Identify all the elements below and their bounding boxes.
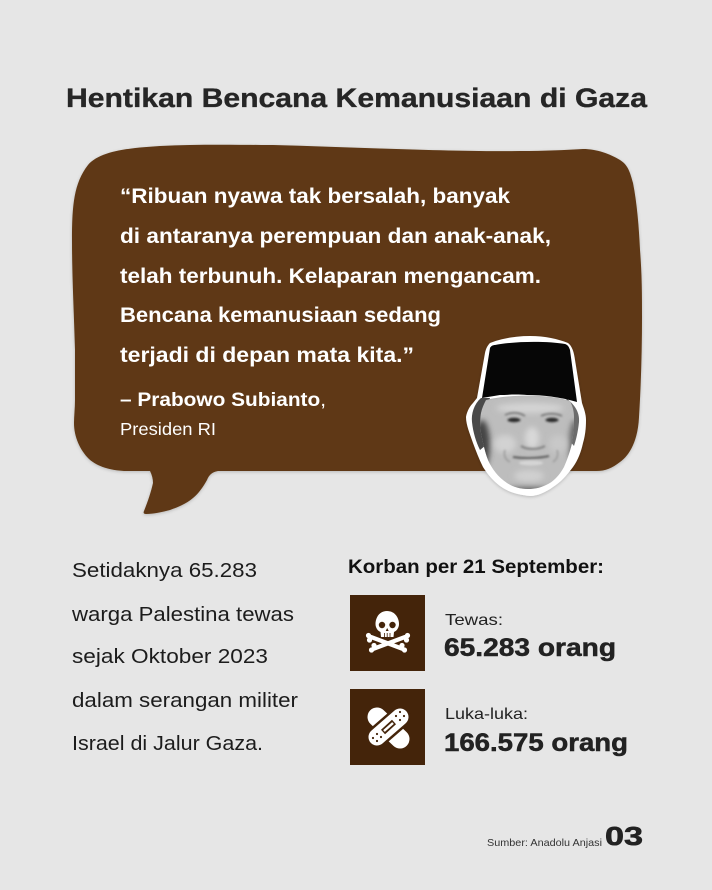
body paragraph xyxy=(71,559,298,755)
nose xyxy=(525,427,539,449)
body paragraph: dalam serangan militer xyxy=(72,689,298,712)
stat: deaths xyxy=(444,612,616,662)
black cap xyxy=(482,342,577,402)
body paragraph: warga Palestina tewas xyxy=(71,603,294,626)
body paragraph: Setidaknya 65.283 xyxy=(72,559,257,582)
quote text: telah terbunuh. Kelaparan mengancam. xyxy=(120,264,541,288)
stat: deaths: 65.283 orang xyxy=(444,634,616,662)
stat: injured: Luka-luka: xyxy=(445,706,528,723)
back bandage xyxy=(377,717,400,739)
mouth xyxy=(513,456,549,466)
sticker outline xyxy=(466,336,586,496)
stat: deaths: Tewas: xyxy=(445,612,503,629)
icon: skull and crossbones xyxy=(350,595,425,671)
attribution: Presiden RI xyxy=(120,419,216,439)
hair and ears xyxy=(472,398,490,450)
cap shadow xyxy=(486,396,566,400)
page number: 03 xyxy=(605,821,643,851)
crossbones xyxy=(371,637,405,649)
quote text xyxy=(120,184,551,367)
quote text: terjadi di depan mata kita.” xyxy=(120,343,414,367)
front bandage xyxy=(377,717,400,737)
body paragraph: Israel di Jalur Gaza. xyxy=(72,732,263,755)
attribution xyxy=(120,390,326,439)
stats heading: Korban per 21 September: xyxy=(348,557,604,578)
body paragraph: sejak Oktober 2023 xyxy=(72,645,268,668)
attribution: – Prabowo Subianto , xyxy=(120,390,326,411)
quote text: “Ribuan nyawa tak bersalah, banyak xyxy=(120,184,510,208)
panel: quote speech bubble xyxy=(72,145,642,514)
quote text: di antaranya perempuan dan anak-anak, xyxy=(120,224,551,248)
stat: injured: 166.575 orang xyxy=(444,729,628,757)
source: Sumber: Anadolu Anjasi xyxy=(487,837,602,849)
cranium xyxy=(376,611,399,637)
title: Hentikan Bencana Kemanusiaan di Gaza xyxy=(66,83,648,113)
quote text: Bencana kemanusiaan sedang xyxy=(120,303,441,327)
stat: injured xyxy=(444,706,628,757)
face xyxy=(480,396,574,489)
eyes and brows xyxy=(505,413,562,422)
icon: crossed bandages xyxy=(350,689,425,765)
portrait sticker xyxy=(466,336,586,499)
